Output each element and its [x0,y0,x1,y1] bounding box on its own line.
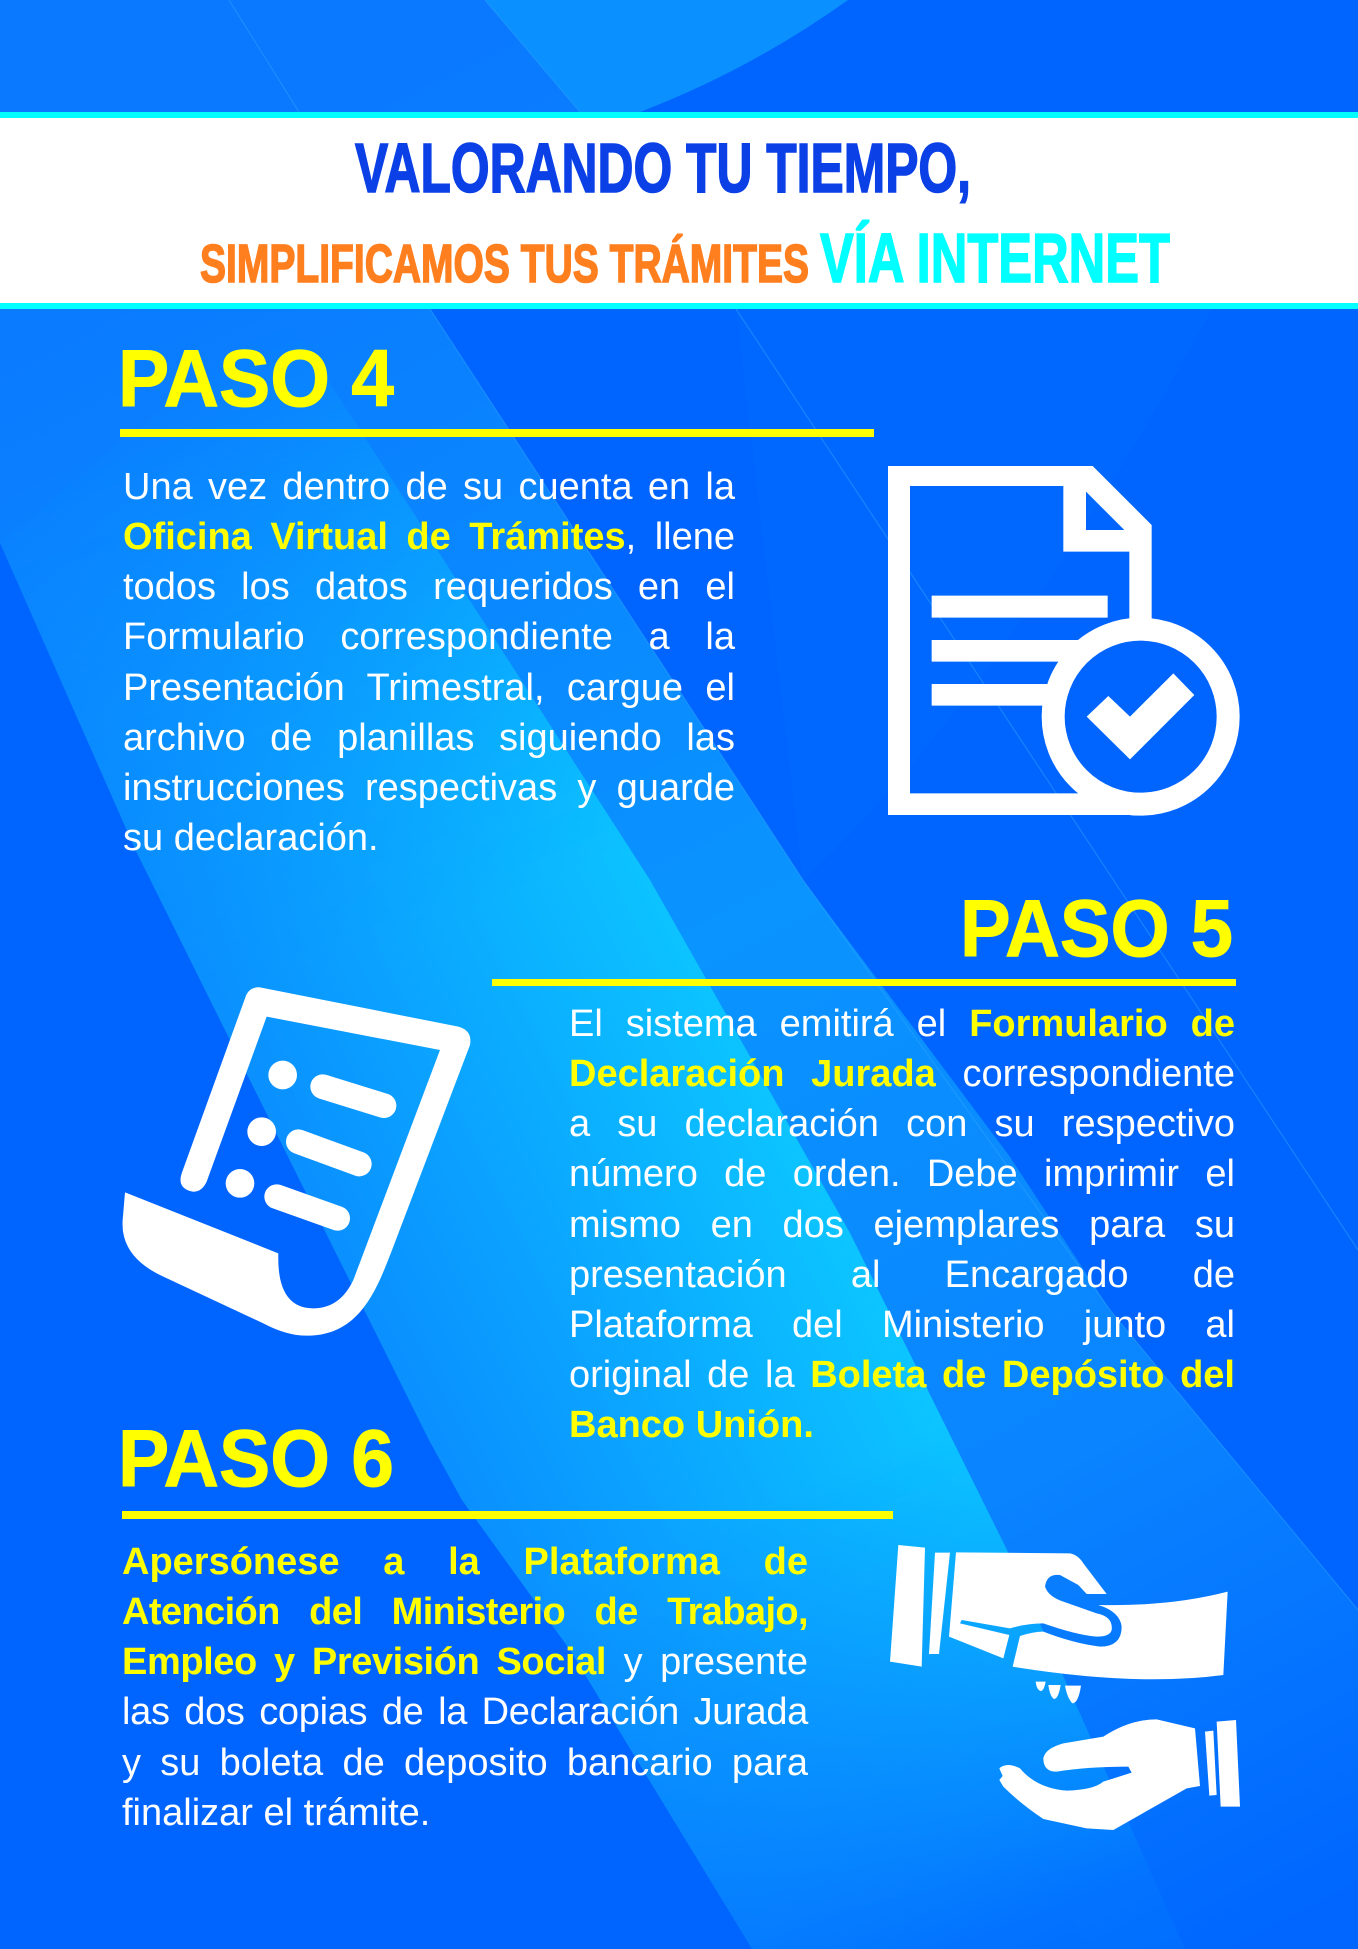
text: paso 5: presentación al Encargado de [569,1254,1235,1296]
text: paso 4 [123,466,735,859]
text: paso 5: El sistema emitirá el Formulario de [569,1003,1235,1045]
text: paso 4: Formulario correspondiente a la [123,616,735,658]
icon: document with check [888,466,1240,816]
panel: paso 5 [122,884,1236,1446]
text: paso 4: Una vez dentro de su cuenta en la [123,466,735,508]
title [200,129,1170,297]
text: paso 4: instrucciones respectivas y guarde [123,767,735,809]
text: paso 6: y su boleta de deposito bancario para [122,1742,808,1784]
heading: paso 5: PASO 5 [960,884,1233,974]
text: paso 6: Atención del Ministerio de Trabajo, [122,1591,808,1633]
panel: paso 4 [118,334,1240,859]
heading: paso 4: PASO 4 [118,334,394,424]
text: paso 5: Declaración Jurada correspondiente [569,1053,1235,1095]
text: paso 6: las dos copias de la Declaración Jurada [122,1691,808,1733]
text: paso 5: Banco Unión. [569,1404,814,1446]
text: paso 4: Oficina Virtual de Trámites, llene [123,516,735,558]
text: paso 4: archivo de planillas siguiendo las [123,717,735,759]
text: paso 5: mismo en dos ejemplares para su [569,1204,1235,1246]
text: paso 5 [569,1003,1235,1446]
heading: paso 4 [118,334,874,437]
icon: receipt [122,987,470,1336]
title: VALORANDO TU TIEMPO, [355,129,971,207]
text: paso 5: Plataforma del Ministerio junto al [569,1304,1235,1346]
text: paso 5: número de orden. Debe imprimir el [569,1153,1235,1195]
title: SIMPLIFICAMOS TUS TRÁMITES [200,234,809,294]
text: paso 4: su declaración. [123,817,379,859]
title: VÍA INTERNET [820,219,1170,297]
text: paso 4: todos los datos requeridos en el [123,566,735,608]
header band [0,112,1358,309]
heading: paso 6 [118,1414,893,1519]
text: paso 6: finalizar el trámite. [122,1792,430,1834]
text: paso 6: Empleo y Previsión Social y presente [122,1641,808,1683]
heading: paso 6: PASO 6 [118,1414,394,1504]
text: paso 4: Presentación Trimestral, cargue el [123,667,735,709]
text: paso 5: a su declaración con su respectivo [569,1103,1235,1145]
text: paso 6 [122,1541,808,1834]
text: paso 6: Apersónese a la Plataforma de [122,1541,808,1583]
text: paso 5: original de la Boleta de Depósito del [569,1354,1235,1396]
heading: paso 5 [492,884,1236,986]
